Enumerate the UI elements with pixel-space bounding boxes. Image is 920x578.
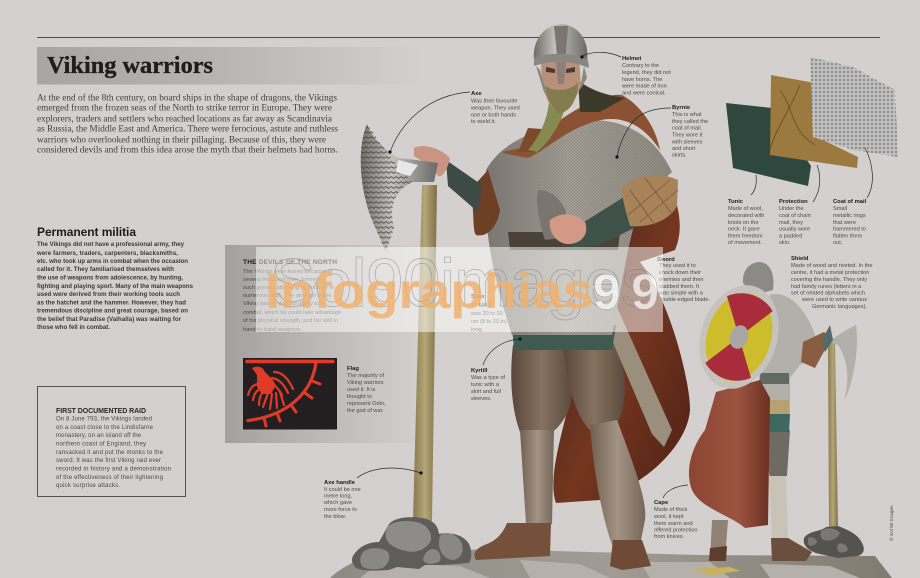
militia text: the use of weapons from adolescence, by hunting,: [37, 274, 183, 281]
panel text: The Vikings were feared because of: [243, 269, 333, 275]
label: tunic: Made of wool,: [728, 206, 763, 212]
label: helmet: Helmet: [622, 56, 641, 62]
label: byrnie: This is what: [672, 112, 702, 118]
militia text: those who fell in combat.: [37, 324, 110, 331]
label: byrnie: They wore it: [672, 132, 703, 138]
callout text: on a coast close to the Lindisfarne: [56, 425, 154, 431]
label: kyrtill: Kyrtill: [471, 368, 488, 374]
label: sword: [657, 257, 710, 303]
mail torso: [485, 120, 672, 335]
top rule: [37, 37, 880, 38]
flag caption: the god of war.: [347, 408, 384, 414]
label: axe: weapon. They used: [470, 106, 520, 112]
militia text: etc. who took up arms in combat when the occasion: [37, 258, 188, 265]
label: coat of mail: Small: [833, 206, 847, 212]
leader: tunic: [751, 175, 756, 195]
label: axe: [470, 91, 520, 125]
label: cape: [653, 500, 697, 540]
leader: byrnie: [615, 108, 671, 159]
panel: the devils of the north: [225, 245, 425, 443]
label: protection: mail, they: [779, 220, 803, 226]
axe blade: [361, 124, 438, 252]
flag caption: used it. It is: [347, 387, 375, 393]
label: kyrtill: skirt and full: [471, 389, 501, 395]
intro text: At the end of the 8th century, on board ships in the shape of dragons, the Vikings: [37, 92, 337, 104]
watermark: 99: [593, 264, 659, 320]
label: byrnie: they called the: [672, 119, 708, 125]
label: shield: Made of wood and riveted. In the: [791, 263, 872, 269]
label: dagger: cm (8 to 20 in): [471, 319, 507, 325]
helmet: [743, 262, 773, 295]
leader: coat of mail: [865, 148, 872, 198]
sword scabbard: [600, 305, 672, 447]
label: byrnie: coat of mail.: [672, 126, 703, 132]
belt and sword hilt: [508, 232, 620, 250]
label: shield: had family runes (letters in a: [791, 284, 862, 290]
shield: [686, 275, 792, 399]
label: coat of mail: Coat of mail: [833, 199, 867, 205]
label: coat of mail: hammered to: [833, 226, 866, 232]
label: dagger: long.: [471, 327, 484, 333]
callout text: monastery, on an island off the: [56, 433, 142, 439]
label: sword: was simple with a: [658, 290, 704, 296]
leader: axe: [388, 92, 470, 154]
leader: kyrtill: [483, 337, 522, 365]
label: coat of mail: flatten them: [833, 234, 863, 240]
intro text: warriors who overlooked nothing in their pillaging. Because of this, they were: [37, 134, 326, 146]
label: cape: Cape: [654, 500, 669, 506]
rock pile: [352, 517, 471, 571]
tunic swatch: [726, 103, 811, 186]
flag caption: thought to: [347, 394, 372, 400]
label: cape: wool, it kept: [653, 514, 684, 520]
label: tunic: Tunic: [728, 199, 744, 205]
body: [755, 294, 820, 415]
label: axe: to wield it.: [471, 119, 496, 125]
intro text: as Russia, the Middle East and America. There were ferocious, astute and ruthless: [37, 124, 338, 134]
label: kyrtill: Was a type of: [471, 375, 505, 381]
label: sword: enemies and then: [659, 277, 703, 283]
label: dagger: [470, 294, 507, 333]
axe handle: [413, 185, 437, 521]
leader: axe handle: [357, 468, 423, 478]
militia text: tremendous discipline and great courage, based on: [37, 307, 188, 314]
boots: [474, 523, 651, 570]
intro text: [37, 92, 338, 156]
padded protection swatch: [770, 75, 858, 168]
label: coat of mail: that were: [833, 220, 856, 226]
callout text: On 8 June 793, the Vikings landed: [56, 416, 152, 422]
callout text: [56, 416, 171, 489]
panel text: combat, which he could take advantage: [243, 310, 341, 316]
face and beard: [541, 58, 581, 113]
label: cape: Made of thick: [654, 507, 687, 513]
panel text: such groups, attacking by surprise in: [243, 285, 334, 291]
label: tunic: of movement.: [728, 240, 762, 246]
label: helmet: were made of iron: [621, 84, 667, 90]
label: tunic: [728, 199, 764, 246]
credit: © Sol 90 Images: [888, 505, 895, 541]
arm holding axe: [414, 146, 500, 235]
label: sword: stabbed them. It: [659, 284, 700, 290]
label: protection: a padded: [779, 234, 802, 240]
militia text: called for it. They familiarised themselves with: [37, 266, 174, 273]
label: cape: offered protection: [654, 528, 697, 534]
label: sword: knock down their: [659, 270, 701, 276]
label: protection: [779, 199, 811, 246]
label: coat of mail: out.: [833, 240, 843, 246]
intro text: explorers, traders and settlers who reached locations as far away as Scandinavia: [37, 114, 332, 124]
militia text: The Vikings did not have a professional army, they: [37, 241, 185, 248]
label: byrnie: [671, 105, 708, 158]
arm with gauntlet: [550, 175, 678, 248]
label: axe: Axe: [471, 91, 482, 97]
label: byrnie: skirts.: [672, 152, 687, 158]
label: shield: set of related alphabets which: [791, 290, 865, 296]
label: byrnie: and short: [672, 146, 696, 152]
title: Viking warriors: [47, 53, 213, 79]
militia text: [36, 241, 194, 331]
label: shield: covering the handle. They only: [791, 277, 867, 283]
label: axe handle: which gave: [323, 500, 352, 506]
label: shield: were used to write various: [801, 297, 867, 303]
label: coat of mail: [833, 199, 867, 246]
label: dagger: Seax: [471, 294, 485, 300]
callout: first documented raid: [38, 386, 186, 496]
panel text: [243, 269, 341, 333]
illustration: stone base: [330, 549, 892, 578]
label: dagger: was 20 to 30: [470, 311, 503, 317]
label: axe handle: the blow.: [324, 514, 347, 520]
watermark: Infographias: [265, 263, 593, 319]
intro text: emerged from the frozen seas of the North to strike terror in Europe. They were: [37, 102, 332, 114]
label: kyrtill: [471, 368, 505, 402]
label: kyrtill: sleeves.: [471, 396, 492, 402]
illustration: rear warrior: [686, 262, 864, 561]
helmet: [534, 24, 589, 98]
panel text: Viking warrior was his ability to: [243, 301, 319, 307]
heading: permanent militia: Permanent militia: [37, 225, 136, 239]
cape: [689, 380, 770, 528]
label: dagger: Its blade: [471, 302, 492, 308]
label: helmet: Contrary to the: [622, 63, 659, 69]
label: tunic: neck. It gave: [728, 226, 760, 232]
rear legs and boots: [709, 430, 812, 561]
label: tunic: decorated with: [728, 213, 764, 219]
callout text: quick surprise attacks.: [56, 483, 120, 489]
back cape: [553, 145, 690, 503]
label: axe: one or both hands: [471, 112, 516, 118]
panel heading: THE DEVILS OF THE NORTH: [243, 259, 337, 266]
label: axe handle: Axe handle: [324, 480, 356, 486]
callout text: northern coast of England, they: [56, 442, 146, 448]
flag caption: [347, 366, 386, 414]
label: helmet: legend, they did not: [622, 70, 671, 76]
callout text: recorded in history and a demonstration: [56, 466, 171, 472]
leader: cape: [663, 485, 688, 498]
panel text: numerous raids. The strength of the: [243, 293, 332, 299]
label: helmet: [621, 56, 671, 96]
coat of mail swatch: [810, 57, 898, 157]
leader: protection: [813, 165, 820, 202]
label: protection: coat of chain: [779, 213, 811, 219]
flag caption: represent Odin,: [347, 401, 386, 407]
callout text: ransacked it and put the monks to the: [56, 450, 164, 456]
leader: helmet: [580, 52, 621, 59]
label: cape: them warm and: [654, 521, 693, 527]
militia text: as the hatchet and the hammer. However, they had: [37, 299, 186, 306]
rocks: [804, 526, 864, 558]
label: axe handle: metre long,: [324, 494, 352, 500]
label: helmet: have horns. The: [622, 77, 662, 83]
label: protection: Under the: [779, 206, 804, 212]
hair: [528, 88, 566, 152]
label: sword: They used it to: [659, 263, 696, 269]
intro text: considered devils and from this idea arose the myth that their helmets had horns.: [37, 144, 338, 156]
militia text: were farmers, traders, carpenters, blacksmiths,: [36, 250, 178, 257]
label: shield: Germanic languages).: [812, 304, 867, 310]
militia text: fighting and playing sport. Many of the main weapons: [37, 283, 194, 290]
illustration: main warrior: [352, 24, 690, 571]
flag caption: The majority of: [347, 373, 384, 379]
label: kyrtill: tunic with a: [471, 382, 500, 388]
axe handle: [828, 342, 838, 528]
icon: raven flag: [243, 358, 337, 430]
panel: permanent militia: [36, 225, 194, 331]
label: cape: from knives.: [654, 534, 685, 540]
label: sword: Sword: [657, 257, 675, 263]
panel text: of his physical strength, and his skill in: [243, 318, 338, 324]
label: protection: skin.: [779, 240, 791, 246]
label: shield: [791, 256, 872, 310]
label: sword: double-edged blade.: [659, 297, 710, 303]
axe blade: [828, 325, 857, 401]
label: shield: Shield: [791, 256, 809, 262]
label: byrnie: with sleeves: [671, 140, 703, 146]
watermark: Sol90images: [270, 245, 655, 321]
label: byrnie: Byrnie: [672, 105, 691, 111]
shoulder cape: [502, 95, 660, 158]
callout text: sword. It was the first Viking raid ever: [56, 458, 161, 464]
tunic skirt: [512, 325, 616, 350]
militia text: the belief that Paradise (Valhalla) was waiting for: [37, 316, 182, 323]
label: helmet: and were conical.: [622, 90, 666, 96]
label: coat of mail: metallic rings: [833, 213, 866, 219]
label: axe: Was their favourite: [471, 98, 517, 104]
leader lines: [357, 52, 872, 498]
flag caption: Flag: [347, 366, 359, 372]
label: shield: centre, it had a metal protection: [791, 270, 869, 276]
militia text: used were derived from their working tools such: [37, 291, 180, 298]
label: axe handle: more force to: [324, 507, 357, 513]
panel text: hand-to-hand weapons.: [243, 327, 302, 333]
label: tunic: knots on the: [728, 220, 758, 226]
legs: [511, 345, 645, 545]
label: protection: Protection: [779, 199, 808, 205]
title band: [37, 47, 422, 84]
callout text: of the effectiveness of their lightening: [56, 475, 163, 481]
callout heading: FIRST DOCUMENTED RAID: [56, 408, 146, 415]
label: tunic: them freedom: [728, 234, 763, 240]
label: axe handle: [323, 480, 361, 520]
illustration: fabric layers: [726, 57, 898, 186]
panel text: several thousand men, formed in: [243, 277, 324, 283]
flag caption: Viking warriors: [347, 380, 384, 386]
label: protection: usually wore: [779, 226, 810, 232]
label: axe handle: It could be one: [324, 487, 361, 493]
